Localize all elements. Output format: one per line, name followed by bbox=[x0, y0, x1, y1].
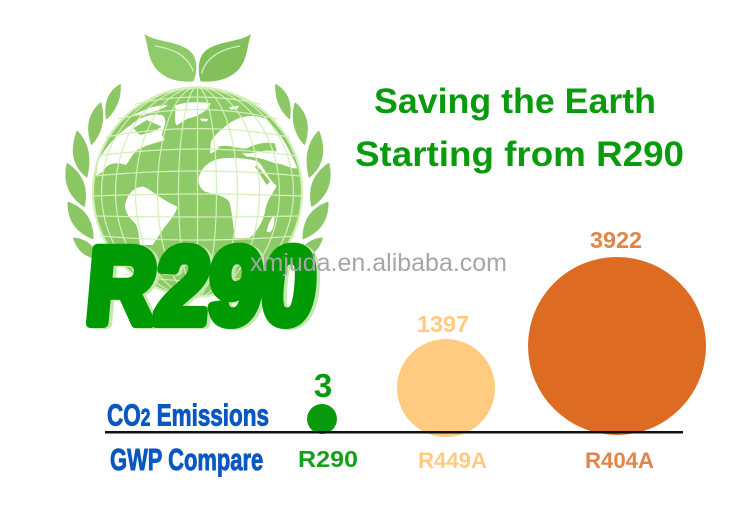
inland seas bbox=[133, 120, 277, 185]
value: 3922: 3922 bbox=[590, 227, 642, 253]
value: 1397: 1397 bbox=[417, 311, 469, 337]
icon: laurel wreath bbox=[66, 85, 330, 258]
title: Saving the Earth bbox=[374, 81, 656, 121]
label: R449A: R449A bbox=[418, 448, 487, 473]
logo: globe, leaves and laurel bbox=[66, 34, 330, 347]
chart: GWP bubble comparison bbox=[105, 227, 706, 473]
label: R290: R290 bbox=[298, 446, 358, 472]
label: R404A: R404A bbox=[585, 448, 654, 473]
label: CO2 Emissions: CO2 Emissions bbox=[107, 397, 269, 432]
bubble: R449A bbox=[397, 339, 495, 437]
value: 3: 3 bbox=[314, 367, 332, 404]
grid lines bbox=[93, 87, 302, 297]
title: Starting from R290 bbox=[355, 134, 684, 174]
continents bbox=[96, 102, 297, 245]
heading: R290 logo text: R290 bbox=[82, 225, 321, 346]
icon: globe bbox=[92, 87, 302, 297]
axis line bbox=[105, 431, 683, 434]
heading: R290 logo text: R290 bbox=[85, 226, 325, 347]
label: GWP Compare: GWP Compare bbox=[110, 442, 263, 477]
bubble: R290 bbox=[307, 404, 337, 434]
title bbox=[355, 81, 684, 174]
watermark: xmjuda.en.alibaba.com bbox=[250, 249, 507, 277]
bubble: R404A bbox=[528, 257, 706, 435]
icon: top leaves bbox=[144, 34, 251, 82]
